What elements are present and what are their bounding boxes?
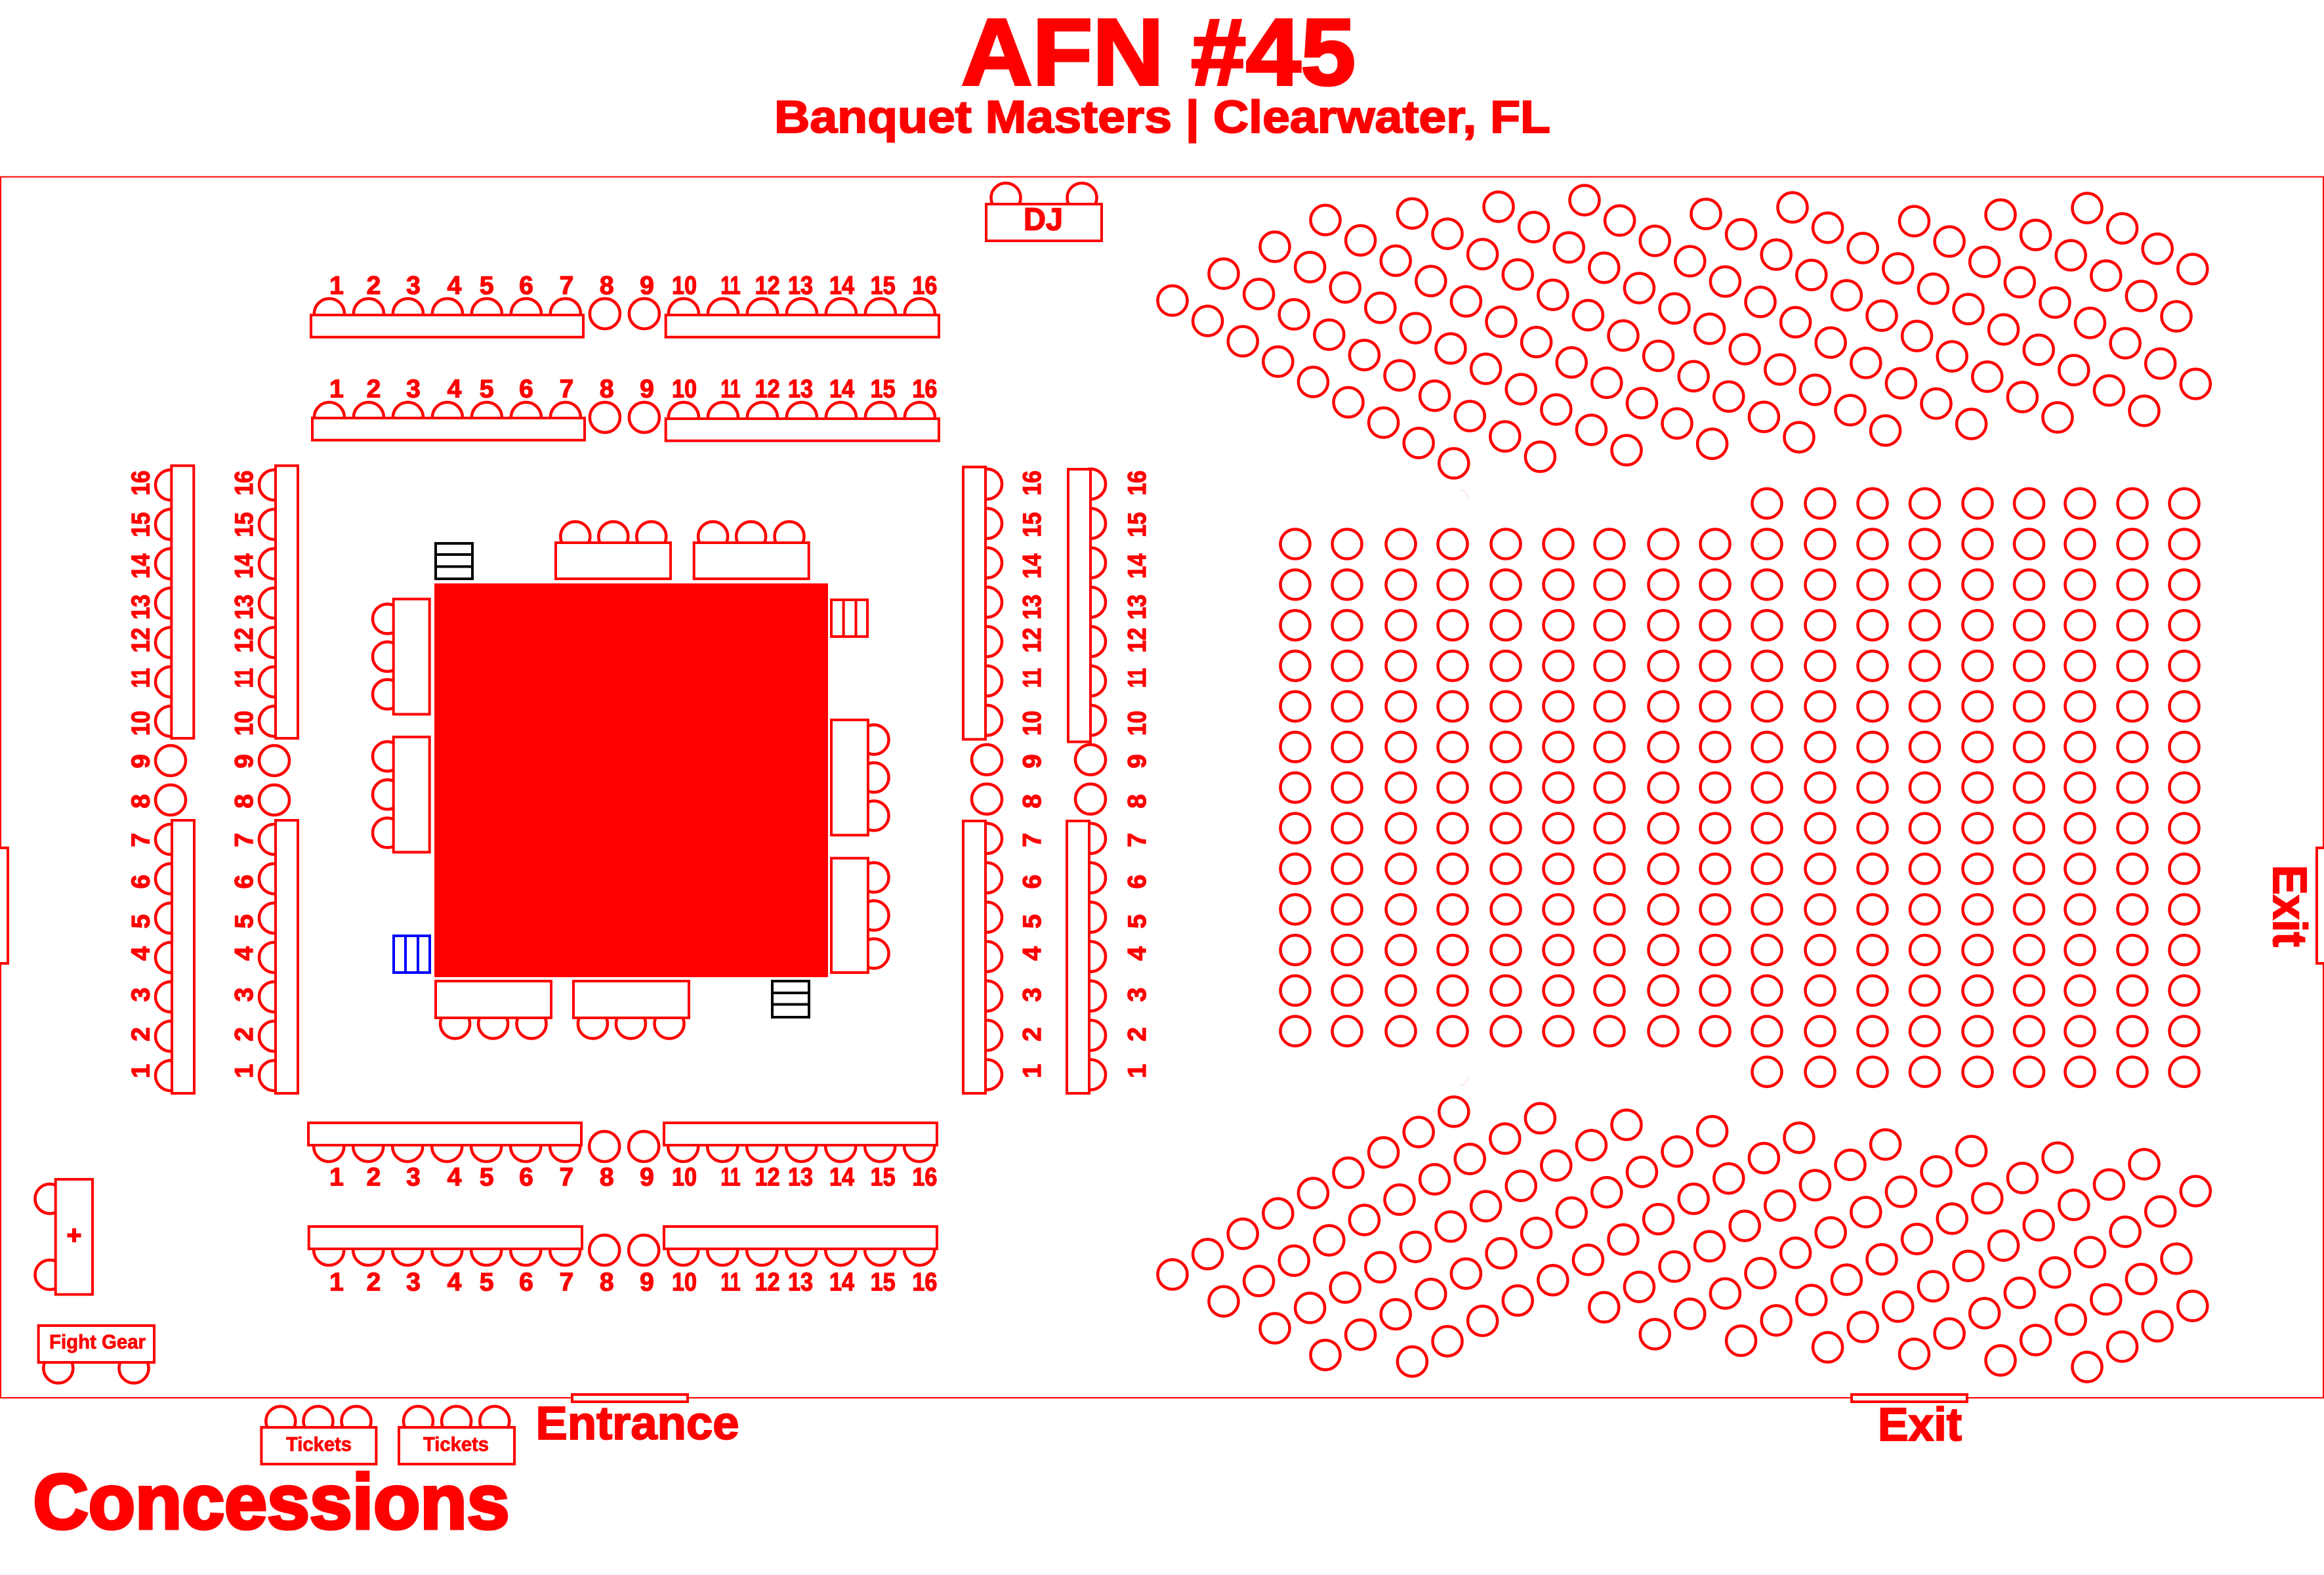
left column 1 numbers: 13 xyxy=(127,595,156,620)
top row 2 numbers: 12 xyxy=(755,375,780,404)
left column 2 numbers xyxy=(230,471,259,1078)
bottom seating row A xyxy=(308,1123,937,1162)
left column 2 numbers: 10 xyxy=(230,711,259,736)
bottom row A numbers: 2 xyxy=(367,1164,381,1192)
top row 1 numbers: 3 xyxy=(406,272,421,300)
top row 2 numbers xyxy=(329,375,937,404)
top row 1 numbers: 13 xyxy=(788,272,813,300)
right column 1 numbers: 9 xyxy=(1018,754,1047,768)
right door xyxy=(2317,848,2324,963)
right column 1 numbers: 1 xyxy=(1018,1064,1047,1078)
right column 1 numbers xyxy=(1018,471,1047,1078)
bottom row B numbers: 1 xyxy=(329,1269,344,1297)
bottom row A numbers: 8 xyxy=(600,1164,614,1192)
bottom row A numbers: 10 xyxy=(672,1164,697,1192)
top row 1 numbers: 16 xyxy=(912,272,937,300)
right column 1 numbers: 5 xyxy=(1018,914,1047,929)
upper angled seating block xyxy=(1157,185,2210,478)
left column 1 numbers: 14 xyxy=(127,553,156,579)
ringside tables top xyxy=(556,522,809,579)
top row 1 numbers: 11 xyxy=(720,272,740,300)
top row 1 numbers: 14 xyxy=(829,272,854,300)
right column 2 numbers: 6 xyxy=(1123,875,1152,889)
ticket table 1 xyxy=(261,1406,376,1464)
top row 1 numbers: 12 xyxy=(755,272,780,300)
right column 1 numbers: 15 xyxy=(1018,512,1047,537)
DJ table xyxy=(986,183,1102,241)
top row 2 numbers: 4 xyxy=(447,375,462,404)
left column 2 numbers: 3 xyxy=(230,988,259,1002)
right seating column 1 xyxy=(963,467,1002,1093)
right column 2 numbers: 16 xyxy=(1123,471,1152,495)
right column 2 numbers: 4 xyxy=(1123,946,1152,961)
bottom row A numbers: 13 xyxy=(788,1164,813,1192)
bottom row B numbers: 14 xyxy=(829,1269,854,1297)
left column 2 numbers: 9 xyxy=(230,754,259,768)
bottom row A numbers: 11 xyxy=(720,1164,740,1192)
bottom row B numbers: 2 xyxy=(367,1269,381,1297)
left column 1 numbers: 11 xyxy=(127,668,156,688)
right column 1 numbers: 8 xyxy=(1018,794,1047,808)
bottom row B numbers: 11 xyxy=(720,1269,740,1297)
right column 1 numbers: 3 xyxy=(1018,988,1047,1002)
left column 1 numbers: 8 xyxy=(127,794,156,808)
ring xyxy=(434,583,828,977)
black corner steps top left xyxy=(436,543,472,579)
bottom row A numbers: 15 xyxy=(871,1164,896,1192)
left column 2 numbers: 16 xyxy=(230,471,259,495)
top row 2 numbers: 15 xyxy=(871,375,896,404)
bottom row B numbers: 10 xyxy=(672,1269,697,1297)
top row 2 numbers: 1 xyxy=(329,375,344,404)
right column 2 numbers: 8 xyxy=(1123,794,1152,808)
right column 1 numbers: 2 xyxy=(1018,1027,1047,1041)
right column 1 numbers: 13 xyxy=(1018,595,1047,620)
bottom row B numbers: 4 xyxy=(447,1269,462,1297)
top row 1 numbers: 15 xyxy=(871,272,896,300)
left column 2 numbers: 5 xyxy=(230,914,259,929)
bottom row B numbers xyxy=(329,1269,937,1297)
entrance label: Entrance xyxy=(535,1398,739,1450)
left column 1 numbers: 1 xyxy=(127,1064,156,1078)
left column 1 numbers xyxy=(127,471,156,1078)
left column 1 numbers: 3 xyxy=(127,988,156,1002)
left column 2 numbers: 8 xyxy=(230,794,259,808)
entrance door xyxy=(572,1395,688,1402)
lower angled seating block xyxy=(1157,1097,2210,1382)
top row 1 numbers: 5 xyxy=(480,272,494,300)
red corner steps xyxy=(831,600,867,637)
left column 1 numbers: 6 xyxy=(127,875,156,889)
right column 2 numbers: 2 xyxy=(1123,1027,1152,1041)
right column 2 numbers: 10 xyxy=(1123,711,1152,736)
bottom row A numbers: 14 xyxy=(829,1164,854,1192)
first aid table: + xyxy=(67,1222,81,1250)
top row 1 numbers: 8 xyxy=(600,272,614,300)
top row 2 numbers: 2 xyxy=(367,375,381,404)
right column 2 numbers: 1 xyxy=(1123,1064,1152,1078)
right column 2 numbers: 14 xyxy=(1123,553,1152,579)
left seating column 1 xyxy=(156,466,194,1093)
top row 2 numbers: 16 xyxy=(912,375,937,404)
bottom row A numbers: 9 xyxy=(640,1164,654,1192)
right column 2 numbers: 13 xyxy=(1123,595,1152,620)
top row 1 numbers xyxy=(329,272,937,300)
bottom row B numbers: 16 xyxy=(912,1269,937,1297)
left column 1 numbers: 7 xyxy=(127,833,156,847)
subtitle: Banquet Masters | Clearwater, FL xyxy=(774,91,1550,143)
bottom row B numbers: 7 xyxy=(560,1269,573,1297)
bottom row A numbers: 4 xyxy=(447,1164,462,1192)
center seating block xyxy=(1281,489,2199,1087)
left column 2 numbers: 7 xyxy=(230,833,259,847)
first aid table xyxy=(35,1179,93,1294)
right column 1 numbers: 6 xyxy=(1018,875,1047,889)
bottom row A numbers: 1 xyxy=(329,1164,344,1192)
venue outline xyxy=(1,177,2323,1398)
left column 1 numbers: 5 xyxy=(127,914,156,929)
right column 1 numbers: 12 xyxy=(1018,627,1047,652)
left column 2 numbers: 12 xyxy=(230,627,259,652)
right column 1 numbers: 14 xyxy=(1018,553,1047,579)
top row 2 numbers: 9 xyxy=(640,375,654,404)
DJ table: DJ xyxy=(1024,202,1063,238)
right exit label: Exit xyxy=(2263,865,2315,947)
right column 2 numbers: 11 xyxy=(1123,668,1152,688)
left column 1 numbers: 10 xyxy=(127,711,156,736)
left column 2 numbers: 4 xyxy=(230,946,259,961)
bottom row B numbers: 3 xyxy=(406,1269,421,1297)
right column 1 numbers: 11 xyxy=(1018,668,1047,688)
top row 1 numbers: 10 xyxy=(672,272,697,300)
left column 2 numbers: 2 xyxy=(230,1027,259,1041)
bottom row A numbers: 6 xyxy=(519,1164,533,1192)
bottom row A numbers: 5 xyxy=(480,1164,494,1192)
left column 1 numbers: 2 xyxy=(127,1027,156,1041)
right column 1 numbers: 4 xyxy=(1018,946,1047,961)
fight gear table xyxy=(39,1326,154,1383)
right seating column 2 xyxy=(1067,469,1106,1093)
left column 2 numbers: 14 xyxy=(230,553,259,579)
bottom row A numbers: 3 xyxy=(406,1164,421,1192)
right column 2 numbers: 12 xyxy=(1123,627,1152,652)
bottom row A numbers xyxy=(329,1164,937,1192)
left column 2 numbers: 6 xyxy=(230,875,259,889)
top row 1 numbers: 6 xyxy=(519,272,533,300)
right column 2 numbers: 7 xyxy=(1123,833,1152,847)
bottom row B numbers: 5 xyxy=(480,1269,494,1297)
left door xyxy=(0,848,8,963)
top row 2 numbers: 11 xyxy=(720,375,740,404)
blue corner steps xyxy=(394,936,430,973)
top row 1 numbers: 2 xyxy=(367,272,381,300)
top row 2 numbers: 6 xyxy=(519,375,533,404)
top row 2 numbers: 14 xyxy=(829,375,854,404)
left column 1 numbers: 9 xyxy=(127,754,156,768)
ringside tables right xyxy=(831,720,888,973)
ticket table 2: Tickets xyxy=(423,1433,489,1456)
ringside tables left xyxy=(373,599,430,852)
black corner steps bottom right xyxy=(772,981,809,1017)
right column 1 numbers: 16 xyxy=(1018,471,1047,495)
left column 2 numbers: 11 xyxy=(230,668,259,688)
bottom exit door xyxy=(1852,1395,1967,1402)
right column 1 numbers: 10 xyxy=(1018,711,1047,736)
ticket table 1: Tickets xyxy=(286,1433,352,1456)
bottom row B numbers: 15 xyxy=(871,1269,896,1297)
bottom row A numbers: 7 xyxy=(560,1164,573,1192)
right column 2 numbers: 9 xyxy=(1123,754,1152,768)
bottom row A numbers: 16 xyxy=(912,1164,937,1192)
bottom row B numbers: 13 xyxy=(788,1269,813,1297)
ticket table 2 xyxy=(399,1406,514,1464)
right column 2 numbers: 15 xyxy=(1123,512,1152,537)
top row 2 numbers: 3 xyxy=(406,375,421,404)
left column 2 numbers: 15 xyxy=(230,512,259,537)
top row 2 numbers: 5 xyxy=(480,375,494,404)
top row 1 numbers: 4 xyxy=(447,272,462,300)
left column 1 numbers: 12 xyxy=(127,627,156,652)
bottom row B numbers: 9 xyxy=(640,1269,654,1297)
right column 2 numbers: 3 xyxy=(1123,988,1152,1002)
bottom row B numbers: 6 xyxy=(519,1269,533,1297)
top row 1 numbers: 9 xyxy=(640,272,654,300)
left seating column 2 xyxy=(259,466,298,1093)
right column 2 numbers: 5 xyxy=(1123,914,1152,929)
top seating row 2 xyxy=(312,402,939,441)
right column 2 numbers xyxy=(1123,471,1152,1078)
bottom row A numbers: 12 xyxy=(755,1164,780,1192)
title: AFN #45 xyxy=(961,0,1356,105)
left column 1 numbers: 4 xyxy=(127,946,156,961)
top row 2 numbers: 10 xyxy=(672,375,697,404)
bottom row B numbers: 12 xyxy=(755,1269,780,1297)
ringside tables bottom xyxy=(436,981,689,1038)
left column 1 numbers: 15 xyxy=(127,512,156,537)
top row 2 numbers: 8 xyxy=(600,375,614,404)
bottom row B numbers: 8 xyxy=(600,1269,614,1297)
left column 1 numbers: 16 xyxy=(127,471,156,495)
fight gear table: Fight Gear xyxy=(49,1330,146,1353)
left column 2 numbers: 1 xyxy=(230,1064,259,1078)
top row 1 numbers: 1 xyxy=(329,272,344,300)
concessions label: Concessions xyxy=(33,1459,509,1545)
bottom seating row B xyxy=(309,1227,937,1265)
bottom exit label: Exit xyxy=(1878,1399,1962,1451)
right column 1 numbers: 7 xyxy=(1018,833,1047,847)
top row 1 numbers: 7 xyxy=(560,272,573,300)
top row 2 numbers: 7 xyxy=(560,375,573,404)
left column 2 numbers: 13 xyxy=(230,595,259,620)
top seating row 1 xyxy=(311,299,939,337)
top row 2 numbers: 13 xyxy=(788,375,813,404)
